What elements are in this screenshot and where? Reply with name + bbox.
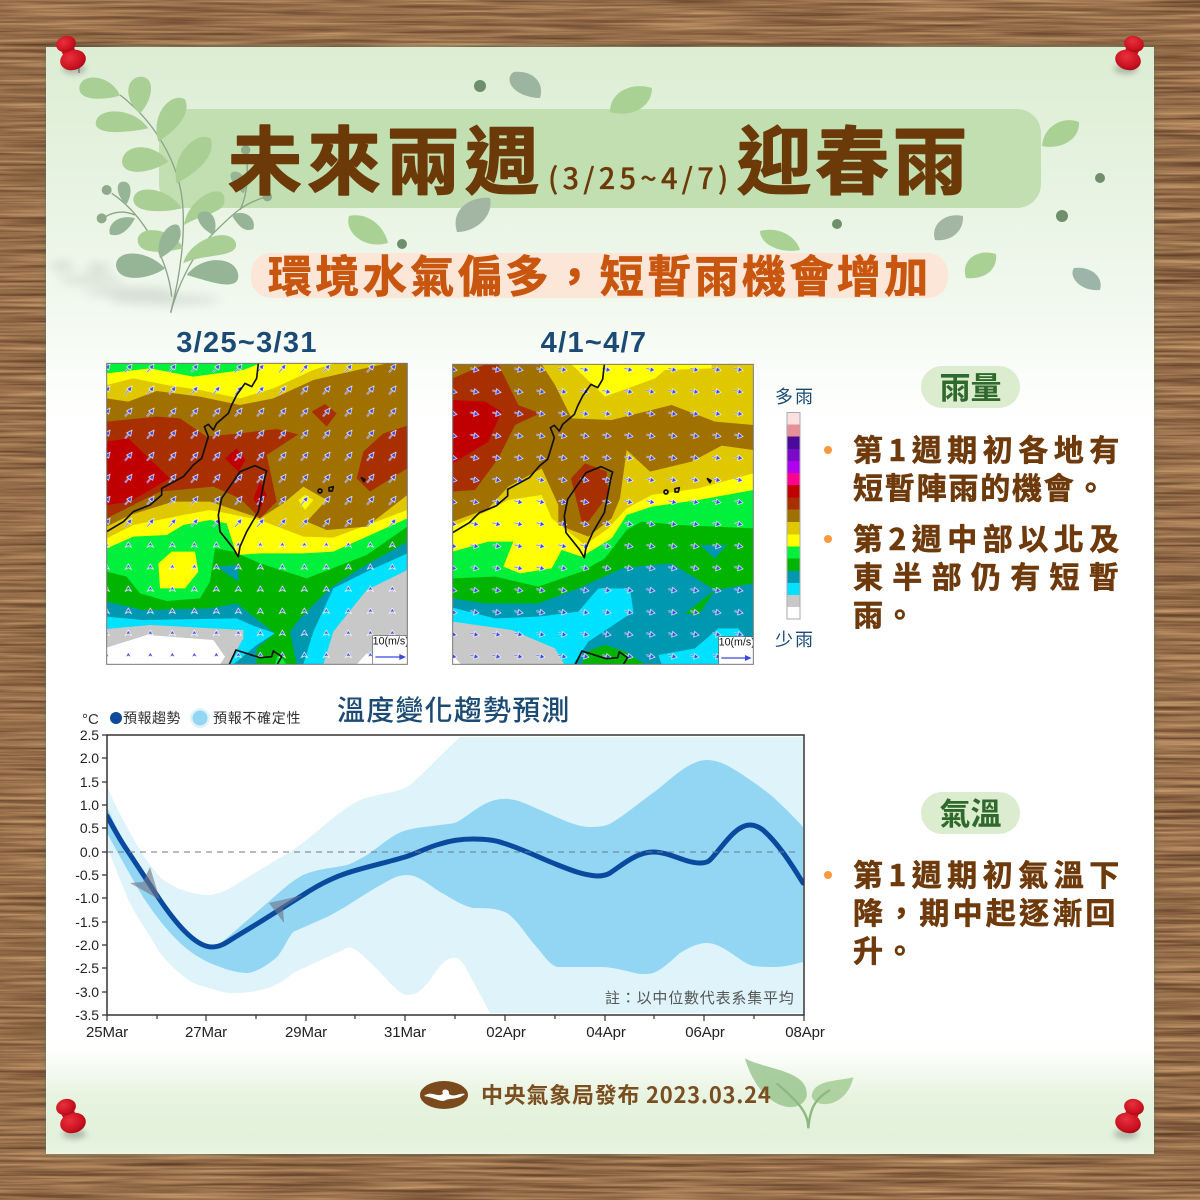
rainfall label pill (921, 363, 1020, 408)
title banner (159, 109, 1041, 208)
uncertainty inner band (107, 760, 803, 974)
rainfall bullets: 第1週期初各地有 (853, 426, 1125, 470)
rainfall map: week 2 (453, 364, 755, 665)
plot frame (107, 735, 804, 1015)
rainfall map: week 1 (107, 363, 409, 665)
rainfall colour legend: 多雨 (775, 383, 815, 409)
direction arrow falling (130, 867, 160, 900)
title (228, 103, 971, 210)
footer logo (420, 1081, 468, 1109)
rainfall bullets: 第2週中部以北及 (853, 515, 1125, 559)
rainfall map: week 2: 10(m/s) (719, 636, 755, 648)
title: 未來兩週 (228, 103, 544, 210)
rainfall bullets: 雨。 (853, 591, 917, 635)
x axis labels: 08Apr (785, 1024, 825, 1041)
chart legend: 預報趨勢 (123, 708, 181, 728)
chart footnote: 註：以中位數代表系集平均 (605, 987, 795, 1008)
footer publisher text: 中央氣象局發布 2023.03.24 (481, 1078, 772, 1110)
y axis labels: 0.0 (80, 844, 99, 860)
rainfall colour legend (775, 383, 815, 652)
x axis labels: 02Apr (486, 1024, 526, 1041)
pushpin: bottom left (54, 1097, 88, 1139)
axes ticks (102, 735, 804, 1021)
x axis labels: 25Mar (86, 1024, 128, 1041)
title: (3/25~4/7) (548, 156, 732, 198)
x axis labels (86, 1024, 825, 1041)
y axis labels: 2.0 (80, 750, 99, 766)
plant shadow (50, 261, 220, 305)
x axis labels: 06Apr (685, 1024, 725, 1041)
temperature bullets: 第1週期初氣溫下 (853, 851, 1125, 895)
title: 迎春雨 (737, 103, 971, 210)
direction arrow rising (269, 895, 303, 923)
footer leaves (745, 1058, 853, 1128)
plant illustration (79, 77, 272, 313)
chart legend: °C (82, 711, 99, 728)
y axis labels (75, 727, 99, 1023)
y axis labels: -1.0 (75, 890, 99, 906)
trend line (107, 816, 803, 947)
y axis labels: 1.5 (80, 774, 99, 790)
y axis labels: -1.5 (75, 914, 99, 930)
y axis labels: -0.5 (75, 867, 99, 883)
temperature bullets: 升。 (853, 927, 917, 971)
scattered leaves (348, 72, 1105, 290)
subtitle: 環境水氣偏多，短暫雨機會增加 (268, 241, 932, 305)
y axis labels: 1.0 (80, 797, 99, 813)
rainfall bullets: 短暫陣雨的機會。 (853, 464, 1107, 508)
y axis labels: 0.5 (80, 820, 99, 836)
rainfall bullets (824, 426, 1128, 635)
temperature bullets: 降，期中起逐漸回 (853, 889, 1119, 933)
pushpin: top left (54, 34, 88, 74)
uncertainty outer band (107, 737, 803, 1013)
temperature label pill (921, 789, 1020, 834)
y axis labels: -2.5 (75, 960, 99, 976)
x axis labels: 31Mar (384, 1024, 426, 1041)
y axis labels: -3.5 (75, 1007, 99, 1023)
x axis labels: 27Mar (185, 1024, 227, 1041)
chart legend (82, 708, 301, 728)
temperature trend chart (75, 727, 825, 1041)
temperature label pill: 氣溫 (940, 789, 1002, 834)
chart legend: 預報不確定性 (213, 708, 301, 728)
chart heading: 溫度變化趨勢預測 (337, 689, 571, 729)
y axis labels: -2.0 (75, 937, 99, 953)
x axis labels: 29Mar (285, 1024, 327, 1041)
y axis labels: 2.5 (80, 727, 99, 743)
rainfall label pill: 雨量 (940, 363, 1002, 408)
temperature bullets (824, 851, 1125, 971)
map heading: week 2: 4/1~4/7 (541, 327, 647, 359)
x axis labels: 04Apr (586, 1024, 626, 1041)
zero reference line (108, 852, 795, 853)
rainfall map: week 1: 10(m/s) (373, 635, 409, 647)
rainfall colour legend: 少雨 (775, 626, 815, 652)
y axis labels: -3.0 (75, 984, 99, 1000)
pushpin: top right (1113, 34, 1146, 74)
map heading: week 1: 3/25~3/31 (176, 327, 318, 359)
rainfall bullets: 東半部仍有短暫 (853, 553, 1128, 597)
pushpin: bottom right (1113, 1097, 1146, 1139)
